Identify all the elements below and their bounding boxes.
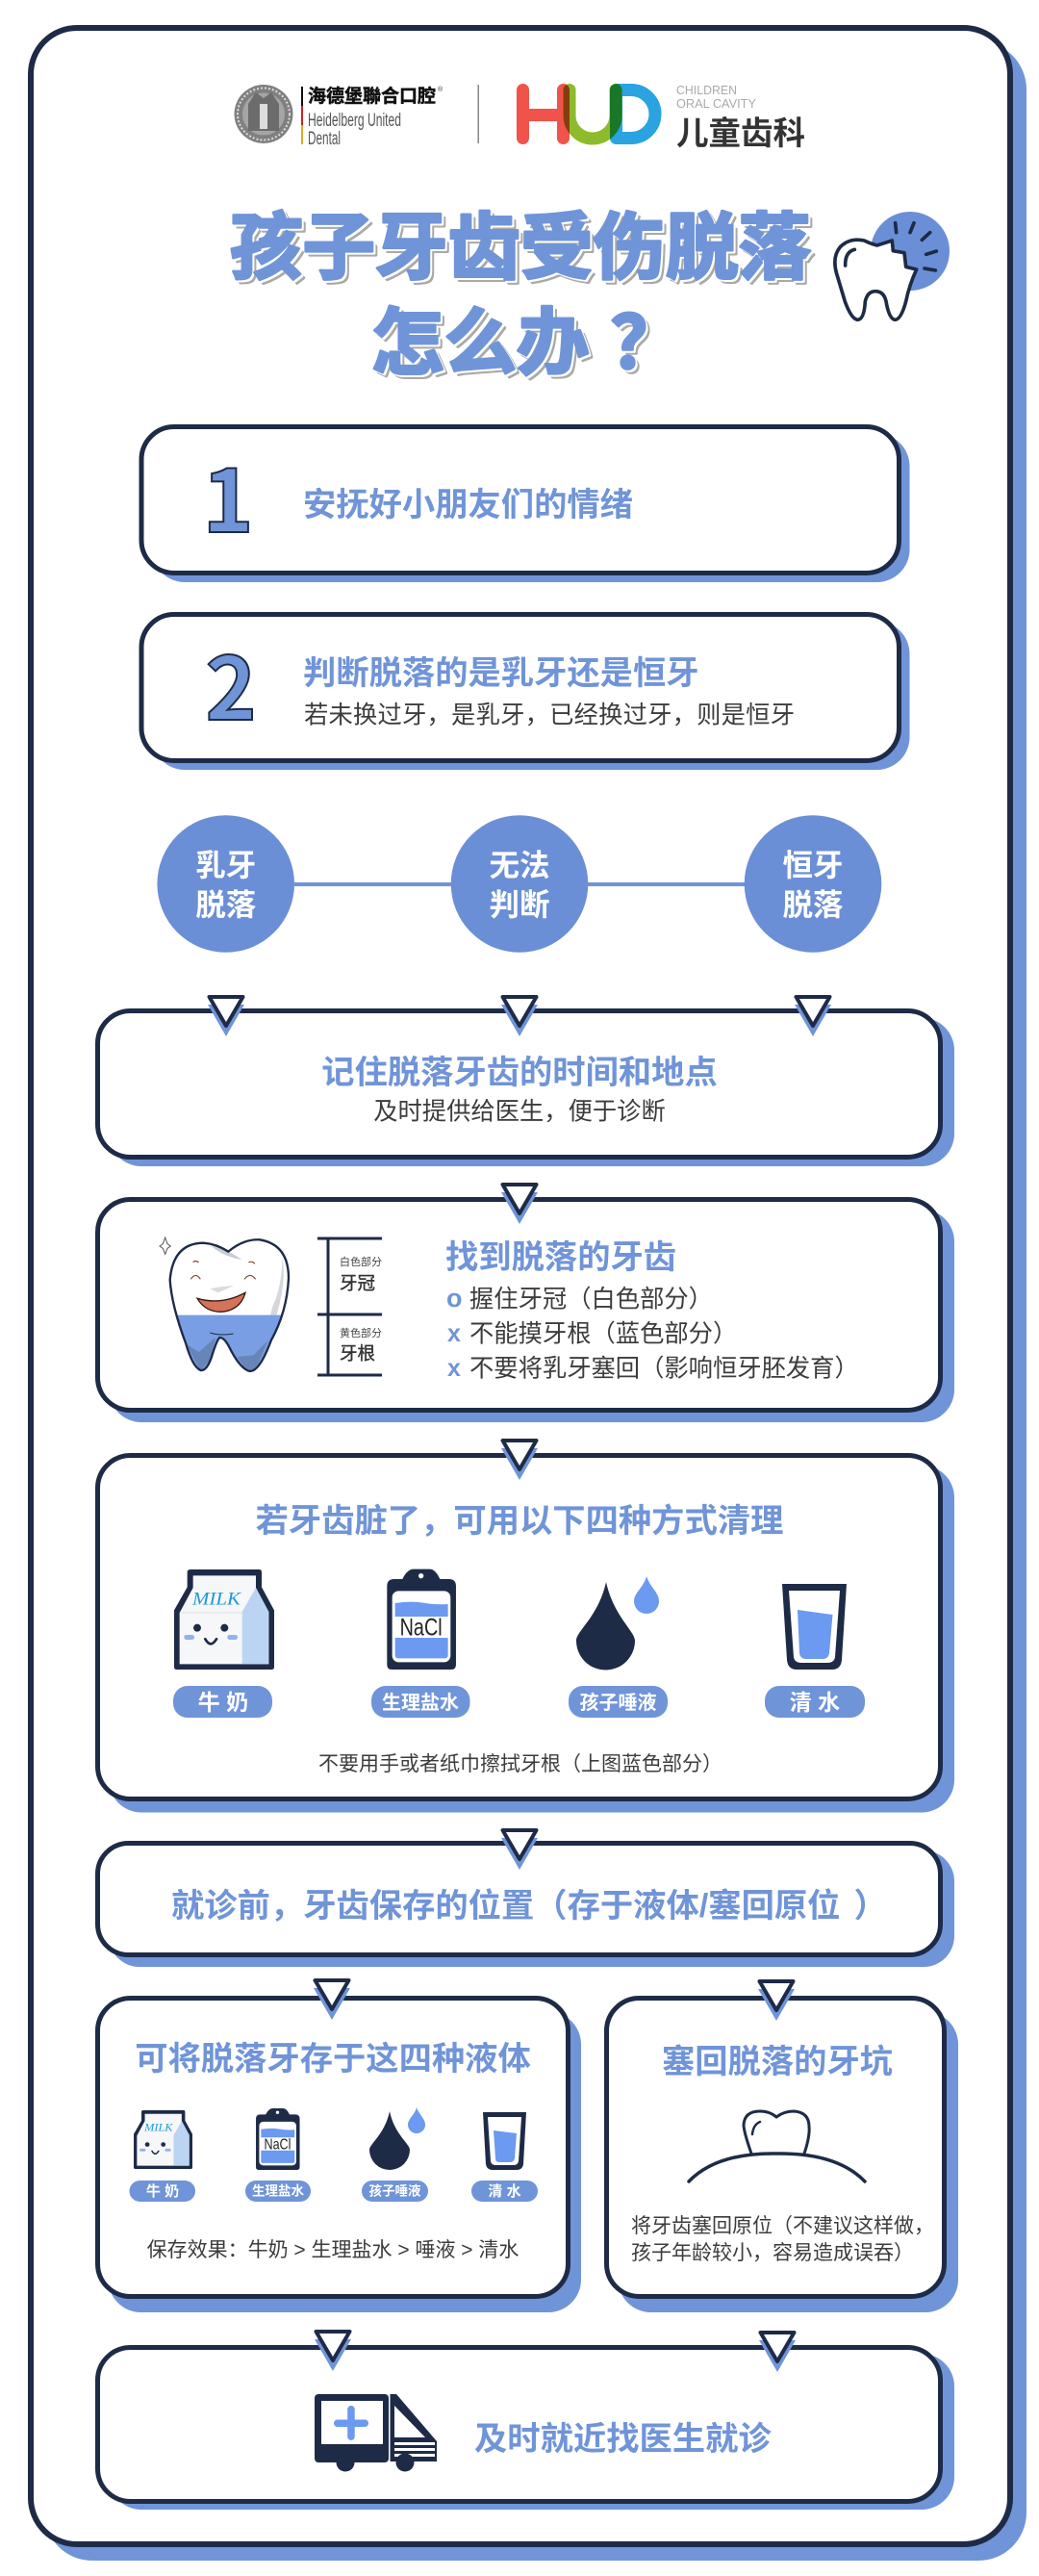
- panel: where to keep the tooth: [98, 1844, 954, 1967]
- heading: 安抚好小朋友们的情绪: [303, 487, 633, 523]
- note: 不要用手或者纸巾擦拭牙根（上图蓝色部分）: [318, 1753, 722, 1775]
- arrow: [501, 1830, 538, 1870]
- icon: saline small: NaCl: [264, 2137, 291, 2153]
- arrows into doctor panel: [315, 2332, 796, 2372]
- crown and root bracket: 白色部分: [340, 1255, 382, 1268]
- panel: put tooth back: [606, 1998, 958, 2312]
- panel: four cleaning methods: [98, 1455, 954, 1813]
- checklist: [446, 1284, 859, 1382]
- icon: tooth in gum: [689, 2111, 865, 2181]
- icon: water glass small: [483, 2112, 526, 2170]
- checklist: x: [447, 1355, 461, 1382]
- circle: baby tooth: [157, 815, 294, 953]
- icon: milk: [174, 1569, 274, 1670]
- logo: Heidelberg United Dental: Heidelberg United: [308, 111, 401, 131]
- label pills small: 孩子唾液: [369, 2182, 421, 2198]
- description: 孩子年龄较小，容易造成误吞）: [631, 2242, 914, 2264]
- arrow: [314, 1980, 350, 2020]
- circle: permanent tooth: [745, 815, 881, 953]
- arrow: [501, 1441, 538, 1480]
- panel: remember time and place: [98, 1010, 954, 1166]
- heading: 就诊前，牙齿保存的位置（存于液体/塞回原位 ）: [171, 1888, 887, 1925]
- icon: broken tooth: [835, 212, 950, 319]
- icon: milk small: MILK: [143, 2122, 174, 2133]
- logo: Heidelberg United Dental: ®: [438, 86, 443, 93]
- crown and root bracket: [317, 1238, 382, 1375]
- logo: Heidelberg United Dental: Dental: [308, 129, 341, 149]
- number 1: 1: [202, 432, 254, 557]
- label pills small: 清 水: [488, 2182, 521, 2200]
- crown and root bracket: 黄色部分: [340, 1326, 382, 1339]
- logo: Heidelberg United Dental: 海德堡聯合口腔: [308, 85, 436, 107]
- number 2: 2: [205, 620, 257, 745]
- icon: saliva drops small: [369, 2107, 425, 2170]
- label pills small: 生理盐水: [252, 2182, 304, 2198]
- icon: ambulance: [315, 2394, 437, 2471]
- icon: water glass: [782, 1584, 847, 1670]
- label pills: 生理盐水: [382, 1692, 459, 1714]
- description: [631, 2215, 934, 2264]
- checklist: o: [446, 1284, 462, 1313]
- icon: saline small: [256, 2108, 300, 2170]
- circle: permanent tooth: 脱落: [782, 887, 844, 922]
- heading: 找到脱落的牙齿: [445, 1239, 676, 1276]
- checklist: 不要将乳牙塞回（影响恒牙胚发育）: [469, 1355, 859, 1382]
- icon: milk: MILK: [191, 1589, 241, 1609]
- icon: milk small: [134, 2110, 192, 2169]
- flow: three judgement circles: [157, 815, 881, 953]
- heading: 塞回脱落的牙坑: [662, 2044, 893, 2080]
- label pills small: [129, 2181, 538, 2202]
- label pills: 孩子唾液: [579, 1691, 656, 1714]
- panel: store in four liquids: [98, 1998, 581, 2312]
- heading: 及时就近找医生就诊: [474, 2421, 772, 2458]
- circle: cannot determine: 判断: [489, 887, 550, 922]
- icon: smiling tooth: [160, 1237, 289, 1371]
- title: 孩子牙齿受伤脱落: [230, 208, 811, 289]
- icon: saline: [387, 1569, 456, 1670]
- panel: find the tooth: [98, 1199, 954, 1422]
- sub text: 及时提供给医生，便于诊断: [373, 1099, 666, 1126]
- checklist: 握住牙冠（白色部分）: [469, 1286, 713, 1313]
- checklist: x: [447, 1320, 461, 1347]
- crown and root bracket: 牙根: [340, 1343, 375, 1364]
- circle: permanent tooth: 恒牙: [782, 848, 844, 882]
- icon: saline: NaCl: [400, 1615, 443, 1642]
- crown and root bracket: 牙冠: [340, 1273, 375, 1293]
- heading: 记住脱落牙齿的时间和地点: [321, 1055, 718, 1091]
- label pills small: 牛 奶: [146, 2183, 179, 2200]
- logo: HUD children oral cavity: [523, 84, 805, 152]
- label pills: 牛 奶: [198, 1690, 248, 1715]
- heading: 若牙齿脏了，可用以下四种方式清理: [256, 1503, 783, 1540]
- arrow: [501, 1185, 538, 1224]
- title: [230, 208, 811, 383]
- checklist: 不能摸牙根（蓝色部分）: [469, 1320, 737, 1347]
- panel: step 1: [141, 427, 910, 582]
- label pills: [173, 1686, 865, 1718]
- circle: cannot determine: 无法: [489, 848, 550, 882]
- arrow: [758, 1981, 795, 2021]
- sub text: 若未换过牙，是乳牙，已经换过牙，则是恒牙: [304, 702, 795, 729]
- note: 保存效果：牛奶 > 生理盐水 > 唾液 > 清水: [147, 2239, 519, 2261]
- circle: baby tooth: 乳牙: [195, 848, 256, 882]
- panel: step 2: [141, 614, 910, 770]
- icon: saliva drops: [576, 1576, 659, 1671]
- logo: HUD children oral cavity: ORAL CAVITY: [676, 97, 757, 111]
- description: 将牙齿塞回原位（不建议这样做，: [631, 2215, 934, 2237]
- heading: 可将脱落牙存于这四种液体: [135, 2041, 531, 2078]
- label pills: 清 水: [790, 1690, 840, 1715]
- circle: baby tooth: 脱落: [195, 887, 257, 922]
- title: 怎么办 ？: [371, 302, 683, 383]
- heading: 判断脱落的是乳牙还是恒牙: [303, 655, 699, 692]
- arrows into remember panel: [208, 997, 831, 1036]
- logo: HUD children oral cavity: CHILDREN: [676, 84, 737, 97]
- circle: cannot determine: [451, 815, 588, 953]
- panel: see a doctor: [98, 2348, 954, 2510]
- logo: Heidelberg United Dental: [235, 85, 443, 149]
- logo: HUD children oral cavity: 儿童齿科: [676, 116, 805, 152]
